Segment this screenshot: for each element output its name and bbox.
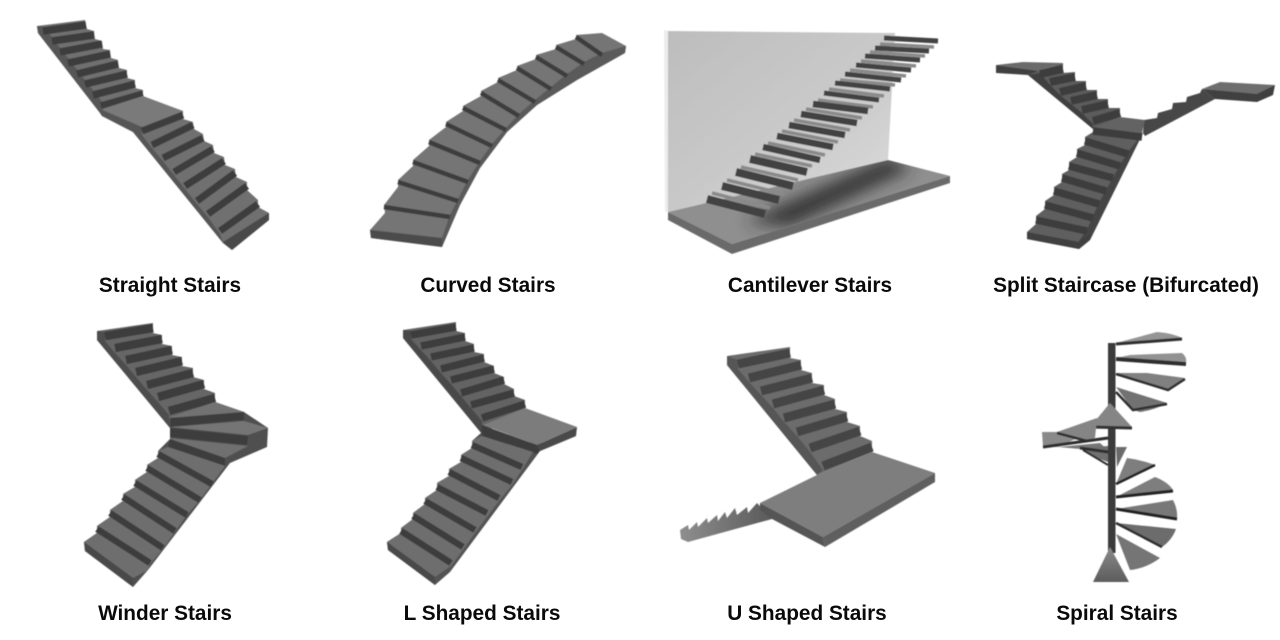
winder riser one [170,412,244,427]
straight stairs landing [102,96,183,127]
split left flight risers [1040,69,1120,121]
spiral center tread [1091,403,1132,428]
cantilever wall edge [664,30,668,212]
cantilever lower treads [707,159,807,214]
u upper flight [727,347,872,475]
split left flight side [1028,73,1093,129]
diagram: l shaped stairs [387,322,577,585]
label: cantilever stairs: Cantilever Stairs [728,274,892,297]
u upper side [727,356,823,475]
spiral left treads [1042,418,1108,465]
winder turning tread two [170,421,268,435]
cantilever floor front [668,176,950,254]
cantilever floor shadow [745,158,912,226]
winder lower treads [84,447,225,578]
straight stairs lower risers [142,115,258,231]
winder riser three [168,439,225,466]
curved stairs outer side [442,46,626,247]
label: l shaped stairs: L Shaped Stairs [404,602,560,625]
u upper risers [738,353,872,466]
label: spiral stairs: Spiral Stairs [1056,602,1178,625]
winder turning body [84,402,268,587]
label: split staircase: Split Staircase (Bifurcated) [993,274,1259,297]
winder turning tread one [170,402,244,418]
u landing front [823,473,935,547]
winder lower risers [97,454,212,563]
winder upper risers [105,328,215,411]
winder upper side [97,331,170,428]
curved stairs risers [384,37,602,217]
l landing side [537,427,577,451]
winder upper flight [97,323,215,428]
winder riser two [170,428,248,445]
split lower flight side [1079,133,1143,249]
split bottom front [1027,232,1090,249]
u landing [760,452,935,537]
spiral top treads [1116,332,1186,412]
diagram: u shaped stairs [680,347,935,547]
u lower small flight [680,503,772,542]
u landing left side [760,503,825,547]
split lower risers [1036,131,1142,231]
cantilever upper treads [824,38,938,100]
l lower body [387,432,576,585]
split left platform [996,62,1063,71]
diagram: winder stairs [84,323,268,587]
cantilever tread tops [712,44,934,208]
split right platform front [1202,85,1275,102]
l landing riser [482,425,540,454]
straight stairs side [37,26,232,250]
split right platform [1202,82,1275,94]
straight stairs upper risers [43,25,143,106]
label: winder stairs: Winder Stairs [98,602,232,625]
label: straight stairs: Straight Stairs [99,274,241,297]
spiral lower treads [1116,447,1177,570]
diagram: cantilever stairs [664,30,950,254]
cantilever floor [668,160,950,244]
l landing [483,408,577,445]
cantilever middle treads [763,104,868,160]
label: curved stairs: Curved Stairs [420,274,556,297]
label: u shaped stairs: U Shaped Stairs [727,602,887,625]
curved stairs body and treads [370,33,626,247]
straight stairs front riser [223,213,269,250]
split center landing [1093,117,1145,133]
split right flight [1143,89,1215,136]
split left flight [1028,63,1120,129]
diagram: spiral stairs [1042,332,1186,582]
l upper risers [411,327,525,418]
diagram: split staircase [996,62,1275,249]
curved stairs front [370,230,442,247]
diagram: straight stairs [37,20,269,250]
l lower treads [387,436,533,577]
spiral base tread [1093,547,1129,582]
winder front riser [84,542,133,587]
l front riser [387,542,435,585]
split left platform front [996,65,1040,75]
l upper flight [403,322,525,434]
l lower risers [401,445,522,563]
l upper side [403,330,482,434]
cantilever wall [667,31,895,212]
winder turning tread three [170,438,248,458]
diagram: curved stairs [370,33,626,247]
spiral pole [1108,343,1116,553]
split lower flight [1027,128,1143,249]
straight stairs body and treads [37,20,269,250]
